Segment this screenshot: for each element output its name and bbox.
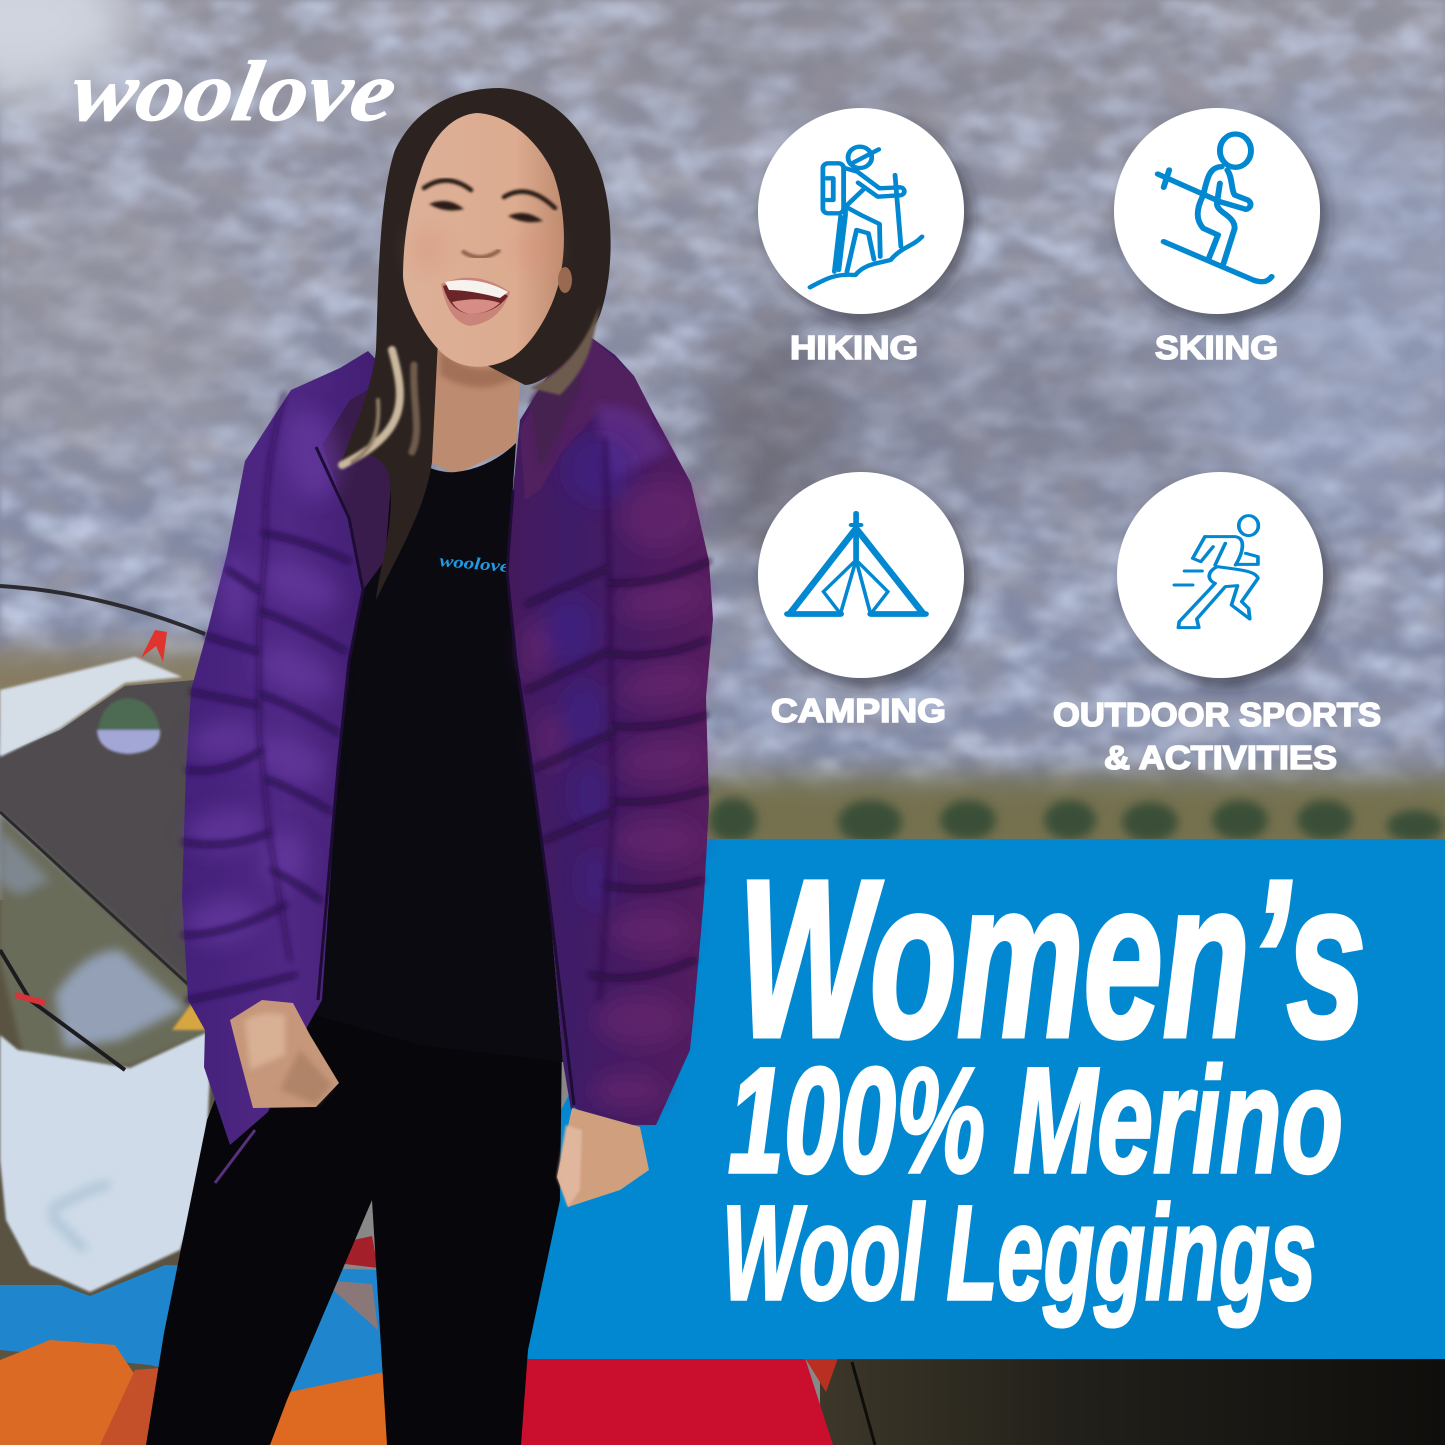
teeth: [445, 280, 508, 298]
jacket right highlights: [521, 436, 711, 1108]
circle: [758, 108, 964, 314]
red bag right: [515, 1358, 833, 1445]
tent white body: [0, 1030, 212, 1292]
orange bag centre: [260, 1372, 390, 1445]
blue bag: [0, 1265, 395, 1395]
leggings: [146, 1010, 562, 1445]
dark ground bottom right: [820, 1350, 1445, 1445]
jacket left lining: [322, 380, 392, 590]
tent mesh window: [0, 812, 215, 1066]
jacket left quilting: [184, 394, 349, 1000]
jacket right quilting: [527, 440, 709, 1000]
tent yellow light: [172, 1003, 208, 1030]
hair: [340, 88, 611, 600]
nose: [462, 250, 500, 257]
cheeks: [410, 228, 555, 272]
jacket hood: [520, 335, 652, 500]
icon: skier: [1158, 134, 1272, 282]
left hand: [230, 1000, 339, 1108]
jacket zippers: [316, 447, 574, 1105]
label: CAMPING: [771, 692, 946, 729]
sleeping bags: [0, 1236, 875, 1445]
circle: [1117, 472, 1323, 678]
activity: outdoor sports: [1053, 472, 1381, 776]
tent shadow fold: [50, 1185, 110, 1250]
right hair ends: [530, 305, 600, 395]
icon: runner: [1174, 516, 1258, 628]
ground left strip: [0, 900, 240, 1445]
hanging lantern: [97, 698, 160, 754]
label: & ACTIVITIES: [1104, 739, 1337, 776]
face: [403, 113, 564, 367]
neck shadow: [440, 350, 522, 388]
blonde hair streaks: [342, 350, 417, 465]
circle: [758, 472, 964, 678]
activity: camping: [758, 472, 964, 729]
orange bag left: [0, 1340, 135, 1445]
orange-red bag: [100, 1368, 160, 1445]
woman: [146, 88, 713, 1445]
shirt logo: woolove: [439, 551, 511, 576]
eyes: [429, 201, 543, 222]
blue banner: [515, 839, 1445, 1359]
grey gap between legs: [322, 1280, 378, 1330]
title: [722, 834, 1366, 1328]
neck: [425, 345, 522, 474]
red tie: [141, 630, 167, 662]
icon: hiker: [810, 147, 922, 287]
red bag between legs: [340, 1236, 378, 1268]
background: grass and shrubs band: [0, 650, 1445, 865]
tent pole arc: [0, 586, 205, 634]
circle: [1114, 108, 1320, 314]
jacket left panel highlights: [181, 405, 346, 948]
tent interior: [0, 680, 195, 1000]
label: OUTDOOR SPORTS: [1053, 696, 1381, 733]
tent white flap: [0, 657, 182, 757]
activity: hiking: [758, 108, 964, 366]
background photo: gravel slope: [0, 0, 1445, 880]
label: HIKING: [790, 329, 918, 366]
mouth: [441, 278, 510, 326]
zipper pull: [215, 1130, 255, 1183]
ear: [558, 267, 572, 293]
icon: tent: [788, 513, 925, 614]
jacket left side: [182, 351, 395, 1145]
right hand: [557, 1108, 649, 1207]
jacket right side: [507, 335, 713, 1125]
black shirt: [315, 443, 563, 1062]
eyebrows: [424, 180, 555, 208]
logo: woolove: [65, 44, 403, 139]
tent diagonal pole: [0, 812, 192, 988]
label: SKIING: [1155, 329, 1278, 366]
tent strap: [0, 950, 125, 1070]
tent: [0, 586, 215, 1292]
activity: skiing: [1114, 108, 1320, 366]
